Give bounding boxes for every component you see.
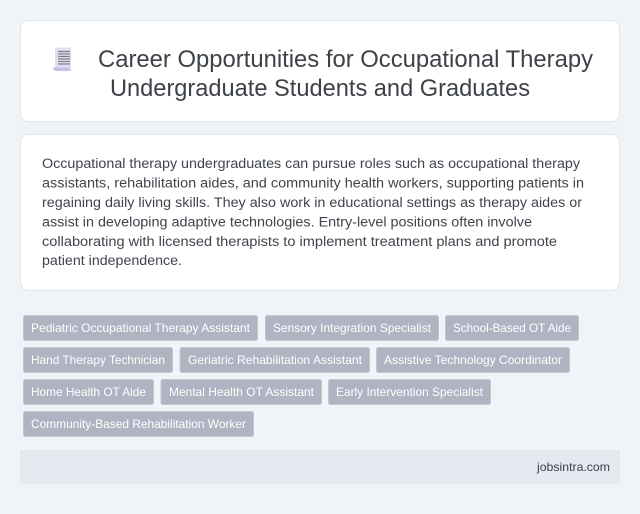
description text: regaining daily living skills. They also work in educational settings as therapy aides or [42,195,582,211]
tag: school [446,316,578,340]
tag: pediatric: Pediatric Occupational Therapy Assistant [31,321,251,335]
tag: hand therapy: Hand Therapy Technician [31,353,165,367]
tag: home health: Home Health OT Aide [31,385,146,399]
description text [42,156,584,269]
tag: early intervention [328,380,490,404]
title [98,46,593,102]
panel: description card [20,134,620,290]
description text: assistants, rehabilitation aides, and community health workers, supporting patients in [42,176,584,192]
tag: assistive technology: Assistive Technology Coordinator [384,353,562,367]
tag: geriatric: Geriatric Rehabilitation Assistant [188,353,363,367]
icon: document scroll [53,47,72,71]
tag: home health [24,380,154,404]
title: Career Opportunities for Occupational Therapy [98,46,593,73]
tag list [24,316,578,436]
tag: sensory [266,316,438,340]
tag: early intervention: Early Intervention Specialist [336,385,484,399]
tag: school: School-Based OT Aide [453,321,571,335]
footer: jobsintra.com [536,460,610,474]
description text: Occupational therapy undergraduates can pursue roles such as occupational therapy [42,156,581,172]
tag: geriatric [180,348,370,372]
title: Undergraduate Students and Graduates [110,75,530,102]
description text: patient independence. [42,253,182,269]
footer [20,450,620,484]
tag: community [24,412,254,436]
description text: collaborating with licensed therapists to implement treatment plans and promote [42,234,557,250]
tag: assistive technology [376,348,570,372]
panel: header card [20,20,620,122]
tag: mental health [161,380,322,404]
tag: community: Community-Based Rehabilitation Worker [31,417,246,431]
tag: mental health: Mental Health OT Assistant [169,385,315,399]
tag: pediatric [24,316,258,340]
tag: hand therapy [24,348,172,372]
tag: sensory: Sensory Integration Specialist [273,321,432,335]
description text: assist in developing adaptive technologies. Entry-level positions often involve [42,214,532,230]
